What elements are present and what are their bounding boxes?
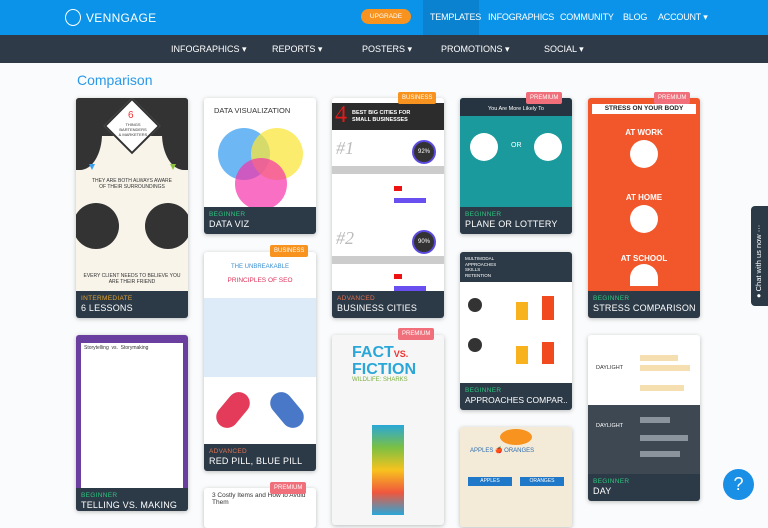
card: 6 lessons: EVERY CLIENT NEEDS TO BELIEVE YOU ARE THEIR FRIEND — [84, 273, 180, 285]
card: telling vs making: TELLING VS. MAKING — [81, 500, 177, 510]
chat tab: ● Chat with us now ⋯ — [754, 225, 763, 298]
card: stress comparison — [588, 98, 700, 318]
text: PREMIUM — [274, 485, 302, 491]
text: PREMIUM — [402, 331, 430, 337]
upgrade button: UPGRADE — [370, 13, 402, 20]
card: fact vs fiction: FICTION — [352, 361, 416, 378]
chat tab — [751, 206, 768, 306]
sub nav: SOCIAL ▾ — [544, 44, 584, 54]
text: PREMIUM — [530, 95, 558, 101]
card: plane or lottery: BEGINNER — [465, 211, 501, 218]
card: plane or lottery — [460, 98, 572, 234]
top nav bar — [0, 0, 768, 35]
help button — [723, 469, 754, 500]
tag business: BUSINESS — [274, 248, 304, 254]
card: approaches: SKILLS — [465, 267, 480, 272]
card: 6 lessons: THINGS BARTENDERS & MARKETERS — [119, 122, 147, 137]
card: red pill blue pill: ADVANCED — [209, 448, 247, 455]
card: red pill blue pill: RED PILL, BLUE PILL — [209, 456, 302, 466]
card: day: DAYLIGHT — [596, 365, 623, 371]
card: day: BEGINNER — [593, 478, 629, 485]
card: plane or lottery: You Are More Likely To — [488, 106, 544, 112]
card: apples oranges: APPLES — [480, 478, 500, 484]
card: fact vs fiction: FACTVS. — [352, 344, 408, 361]
card: red pill blue pill: THE UNBREAKABLE — [231, 264, 289, 270]
text: BUSINESS — [402, 95, 432, 101]
card: stress comparison: AT SCHOOL — [621, 254, 667, 263]
card: red pill blue pill: PRINCIPLES OF SEO — [227, 277, 293, 284]
card: approaches: MULTIMODAL — [465, 256, 494, 261]
card: telling vs making: Storytelling vs. Storymaking — [84, 345, 148, 351]
card: red pill blue pill — [204, 252, 316, 471]
card: data viz — [204, 98, 316, 234]
top nav bar: COMMUNITY — [560, 12, 614, 22]
card: stress comparison: AT HOME — [626, 193, 662, 202]
card: business cities: SMALL BUSINESSES — [352, 117, 408, 123]
help button: ? — [733, 474, 744, 494]
card: business cities: #2 — [336, 228, 354, 248]
card: stress comparison: BEGINNER — [593, 295, 629, 302]
top nav bar: ACCOUNT ▾ — [658, 12, 708, 22]
card: day: DAYLIGHT — [596, 423, 623, 429]
card: data viz: DATA VIZ — [209, 219, 249, 229]
card: 3 costly items: 3 Costly Items and How to Avoid Them — [212, 492, 305, 506]
card: fact vs fiction: WILDLIFE: SHARKS — [352, 377, 408, 383]
card: 3 costly items — [204, 488, 316, 528]
card: stress comparison: STRESS ON YOUR BODY — [605, 105, 683, 112]
logo — [65, 9, 156, 26]
card: 6 lessons: 6 LESSONS — [81, 303, 133, 313]
card: 6 lessons: 6 — [128, 110, 134, 121]
card: 6 lessons: INTERMEDIATE — [81, 295, 133, 302]
logo: VENNGAGE — [86, 11, 156, 25]
card: approaches: RETENTION — [465, 272, 491, 278]
card: stress comparison: AT WORK — [625, 128, 663, 137]
heading: Comparison — [77, 72, 152, 88]
card: approaches — [460, 252, 572, 410]
card: business cities: BEST BIG CITIES FOR — [352, 110, 410, 116]
card: day: DAY — [593, 486, 611, 496]
top nav bar: TEMPLATES — [430, 12, 481, 22]
card: data viz: DATA VISUALIZATION — [214, 106, 290, 115]
card: approaches: BEGINNER — [465, 387, 501, 394]
card: plane or lottery: PLANE OR LOTTERY — [465, 219, 558, 229]
card: business cities: #1 — [336, 138, 354, 158]
card: telling vs making — [76, 335, 188, 511]
tag business — [270, 245, 308, 257]
card: business cities — [332, 98, 444, 318]
card: day — [588, 335, 700, 501]
top nav bar: BLOG — [623, 12, 647, 22]
card: business cities: ADVANCED — [337, 295, 375, 302]
card: 6 lessons — [76, 98, 188, 318]
card: apples oranges: ORANGES — [529, 478, 554, 484]
sub nav — [0, 35, 768, 63]
card: telling vs making: BEGINNER — [81, 492, 117, 499]
top nav bar: INFOGRAPHICS — [488, 12, 554, 22]
sub nav: REPORTS ▾ — [272, 44, 322, 54]
card: approaches: APPROACHES — [465, 262, 496, 266]
card: fact vs fiction — [332, 335, 444, 525]
card: data viz: BEGINNER — [209, 211, 245, 218]
sub nav: PROMOTIONS ▾ — [441, 44, 510, 54]
card: business cities: 92% — [418, 149, 430, 155]
card: business cities: 90% — [418, 239, 430, 245]
card: business cities: 4 — [335, 102, 347, 128]
sub nav: POSTERS ▾ — [362, 44, 412, 54]
text: PREMIUM — [658, 95, 686, 101]
card: 6 lessons: THEY ARE BOTH ALWAYS AWARE OF THEIR SURROUNDINGS — [92, 178, 172, 190]
sub nav: INFOGRAPHICS ▾ — [171, 44, 247, 54]
card: apples oranges — [460, 427, 572, 527]
card: plane or lottery: OR — [511, 142, 522, 149]
card: apples oranges: APPLES 🍎 ORANGES — [470, 448, 534, 454]
upgrade button — [361, 9, 411, 24]
card: business cities: BUSINESS CITIES — [337, 303, 417, 313]
card: stress comparison: STRESS COMPARISON — [593, 303, 695, 313]
